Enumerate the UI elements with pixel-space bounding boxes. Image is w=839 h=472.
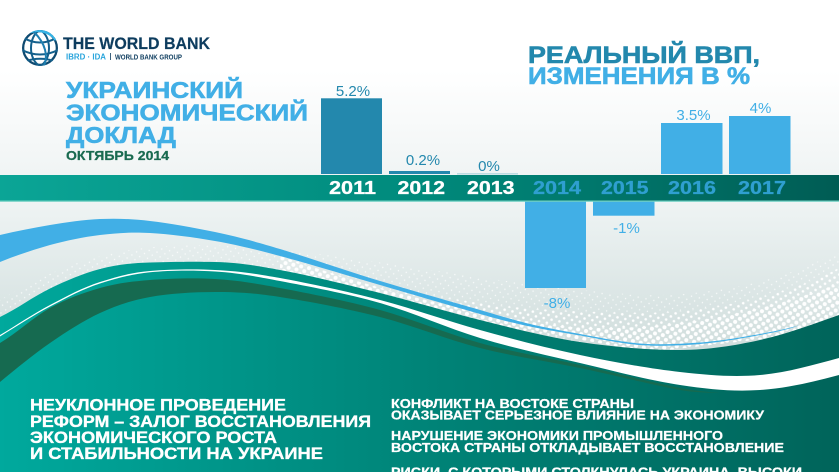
bar 2011 [321,98,382,174]
title: report name [66,76,308,148]
blue swoosh [0,219,800,346]
value labels [336,83,771,312]
logo sub-line IBRD IDA: IBRD · IDA [66,52,106,62]
headline text: reforms: РЕФОРМ – ЗАЛОГ ВОССТАНОВЛЕНИЯ [30,413,371,431]
text block: key points: ВОСТОКА СТРАНЫ ОТКЛАДЫВАЕТ ВОССТАНОВЛЕНИЕ [391,440,784,455]
bar 2016 [661,123,722,174]
year labels: 2017 [738,177,786,198]
text block: key points: НАРУШЕНИЕ ЭКОНОМИКИ ПРОМЫШЛЕННОГО [391,428,723,443]
bar 2015 [593,200,654,216]
title: report name: УКРАИНСКИЙ [66,76,243,103]
value labels: 4% [750,100,771,117]
halftone dots band [0,245,839,352]
background: lower area [0,200,839,355]
value labels: 0% [478,158,500,175]
date subtitle: ОКТЯБРЬ 2014 [66,148,170,163]
value labels: 3.5% [676,107,711,124]
text block: key points: КОНФЛИКТ НА ВОСТОКЕ СТРАНЫ [391,396,634,411]
headline text: reforms [30,396,371,463]
logo sub-line World Bank Group: WORLD BANK GROUP [115,52,182,62]
year labels: 2012 [398,177,445,198]
dark green swoosh [0,278,720,393]
logo divider [109,53,112,60]
text block: key points [391,396,802,472]
year labels [329,177,786,198]
value labels: 5.2% [336,83,370,100]
logo wordmark: THE WORLD BANK [63,35,210,53]
bar 2012 [389,171,450,174]
year labels: 2015 [601,177,648,198]
year labels: 2016 [668,177,716,198]
white stripe [0,269,839,391]
value labels: -1% [613,220,640,237]
bar 2017 [729,116,790,174]
headline text: reforms: И СТАБИЛЬНОСТИ НА УКРАИНЕ [30,445,323,463]
year labels: 2011 [329,177,376,198]
value labels: 0.2% [406,152,440,169]
headline text: reforms: НЕУКЛОННОЕ ПРОВЕДЕНИЕ [30,396,286,414]
band highlight line [0,200,839,202]
background: upper area [0,0,839,176]
text block: key points: ОКАЗЫВАЕТ СЕРЬЕЗНОЕ ВЛИЯНИЕ НА ЭКОНОМИКУ [391,408,765,422]
chart title: ИЗМЕНЕНИЯ В % [528,63,750,90]
value labels: -8% [544,295,570,312]
year labels: 2013 [467,177,514,198]
chart title [528,41,760,90]
headline text: reforms: ЭКОНОМИЧЕСКОГО РОСТА [30,429,277,447]
year labels: 2014 [533,177,582,198]
bar 2014 [525,200,586,288]
chart title: РЕАЛЬНЫЙ ВВП, [528,41,760,69]
teal year band [0,175,839,201]
icon: globe [22,30,58,66]
chart: real GDP by year [0,83,839,312]
title: report name: ЭКОНОМИЧЕСКИЙ [66,98,308,126]
logo: The World Bank [22,30,210,66]
title: report name: ДОКЛАД [66,122,176,148]
bar 2013 [457,172,518,175]
lower teal wave panel [0,262,839,472]
